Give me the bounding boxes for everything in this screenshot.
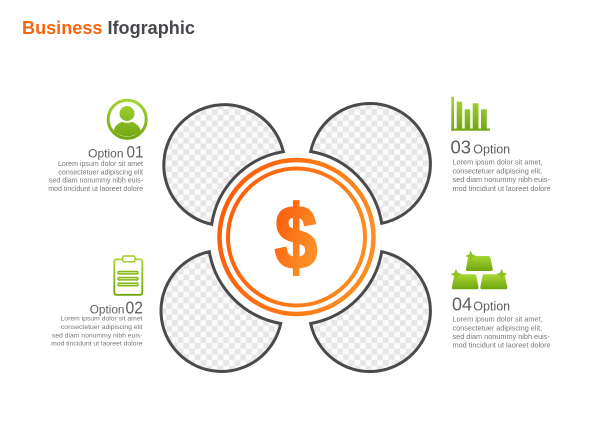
text: option 01: Lorem ipsum dolor sit amet: [58, 161, 143, 168]
text: option 01: consectetuer adipiscing elit: [58, 170, 143, 176]
text: option 03: Lorem ipsum dolor sit amet,: [452, 158, 543, 167]
heading: option 01: [88, 143, 144, 162]
text: option 04: sed diam nonummy nibh euis-: [452, 332, 550, 341]
icon: clipboard: [114, 256, 142, 295]
heading: option 02: 02: [125, 298, 143, 318]
text: option 04: mod tincidunt ut laoreet dolore: [452, 341, 551, 350]
petal: top left: [164, 105, 283, 224]
icon: person: [108, 100, 146, 138]
text: option 02: sed diam nonummy nibh euis-: [52, 332, 142, 339]
heading: option 01: Option: [88, 147, 124, 161]
text: option 02: consectetuer adipiscing elit: [61, 324, 143, 331]
title: Business Ifographic: [22, 18, 195, 38]
icon: gold bars: [452, 252, 507, 289]
heading: option 01: 01: [126, 143, 144, 162]
icon: dollar sign: $: [275, 187, 317, 287]
icon: bar chart: [451, 97, 490, 131]
heading: option 03: Option: [473, 142, 510, 156]
heading: option 03: [450, 136, 510, 157]
center coin: [220, 160, 374, 314]
heading: option 02: [90, 298, 143, 318]
text: option 04: Lorem ipsum dolor sit amet,: [452, 315, 543, 324]
heading: option 04: [452, 295, 510, 315]
text: option 01: sed diam nonummy nibh euis-: [49, 178, 144, 185]
text: option 03: consectetuer adipiscing elit,: [452, 166, 542, 176]
text: option 02: Lorem ipsum dolor sit amet: [61, 316, 143, 323]
petal: top right: [311, 103, 430, 223]
petal: bottom right: [311, 252, 430, 372]
text: option 01: mod tincidunt ut laoreet dolore: [48, 186, 143, 193]
text: option 02: mod tincidunt ut laoreet dolore: [51, 341, 143, 348]
text: option 03: mod tincidunt ut laoreet dolore: [452, 184, 551, 193]
heading: option 02: Option: [90, 302, 124, 316]
heading: option 03: 03: [450, 136, 471, 157]
text: option 04: consectetuer adipiscing elit,: [452, 323, 542, 332]
petal: bottom left: [161, 252, 281, 371]
heading: option 04: 04: [452, 295, 472, 315]
text: option 03: sed diam nonummy nibh euis-: [452, 175, 550, 184]
heading: option 04: Option: [473, 300, 510, 314]
